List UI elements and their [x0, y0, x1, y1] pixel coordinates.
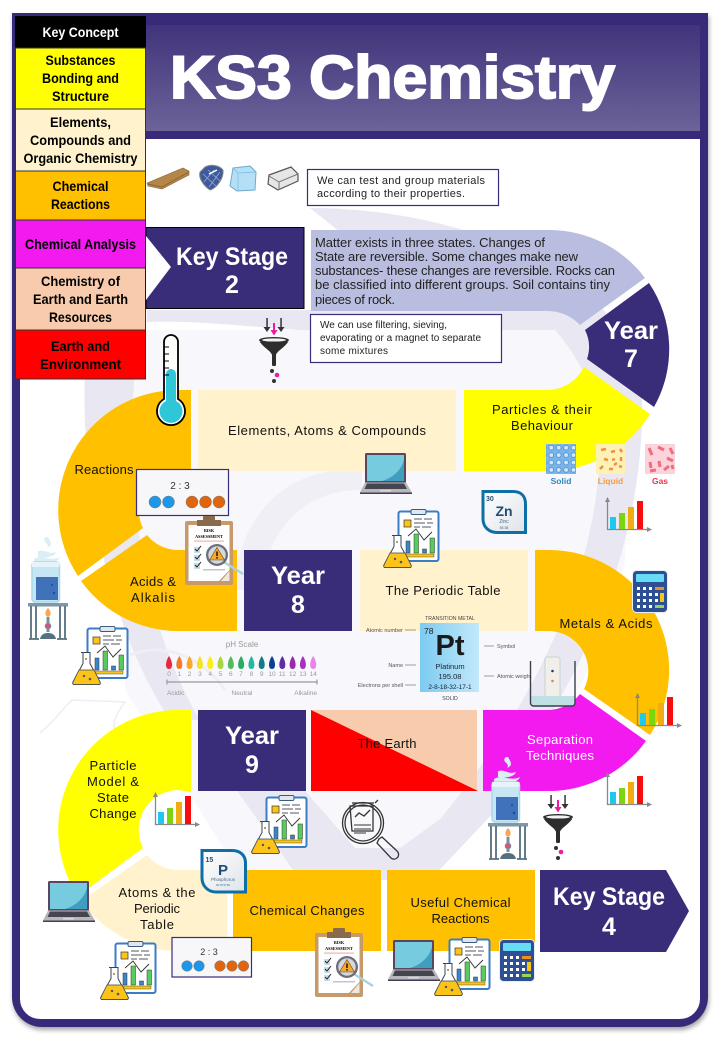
- liquid: Liquid: [598, 476, 623, 486]
- pH scale: 7: [239, 671, 243, 678]
- gas: Gas: [652, 476, 668, 486]
- pH scale: 8: [250, 671, 254, 678]
- key concept table: Key Concept: [42, 24, 119, 40]
- topic: separation techniques: [483, 694, 646, 791]
- topic: metals and acids: [535, 550, 669, 735]
- platinum element diagram: Symbol: [497, 644, 515, 650]
- topic: the earth: [311, 710, 478, 791]
- key: substances: Substances: [46, 52, 116, 68]
- topic: particles and behaviour: Particles & their: [492, 402, 593, 417]
- icon: report: [101, 942, 156, 1000]
- platinum element diagram: Name: [388, 663, 403, 669]
- key: elements: Organic Chemistry: [24, 150, 138, 166]
- title: KS3 Chemistry: [170, 44, 616, 111]
- icons: materials: [147, 165, 298, 191]
- topic: particle model: Model &: [87, 774, 139, 789]
- topic: the earth: The Earth: [358, 736, 416, 751]
- icon: calculator: [632, 570, 668, 612]
- text box: filtering: We can use filtering, sieving,: [320, 320, 447, 331]
- solid: Solid: [551, 476, 571, 486]
- key: reactions: [16, 171, 146, 220]
- topic: particle model: Particle: [90, 758, 136, 773]
- platinum element diagram: Atomic number: [366, 628, 403, 634]
- chromatography beaker: [530, 657, 575, 706]
- key stage 4 arrow: [540, 870, 689, 952]
- key: earth resources: Chemistry of: [41, 273, 120, 289]
- icon: bar chart: [605, 497, 652, 532]
- topic: separation techniques: Techniques: [526, 748, 594, 763]
- topic: useful chemical reactions: Useful Chemical: [410, 895, 511, 910]
- icon: funnel top: [259, 318, 289, 383]
- key stage 4 arrow: 4: [602, 913, 616, 941]
- icon: beaker and burner left: [28, 537, 68, 639]
- element tile zinc: [483, 492, 526, 532]
- pH scale: 11: [279, 671, 286, 678]
- topic: reactions: [58, 390, 191, 576]
- topic: acids and alkalis: [81, 535, 237, 631]
- key: elements: [16, 109, 146, 171]
- topic: atoms and the periodic table: Periodic: [134, 901, 180, 916]
- key stage 2 summary band: pieces of rock.: [315, 292, 395, 307]
- icon: bar chart: [635, 693, 682, 728]
- year 7 sector: 7: [624, 345, 638, 373]
- risk assessment clipboard: [315, 928, 373, 997]
- element tile phosphorus: Phosphorus: [211, 877, 236, 882]
- ratio box 1: [136, 470, 228, 516]
- platinum element diagram: 2-8-18-32-17-1: [428, 684, 472, 691]
- key: substances: Structure: [52, 88, 109, 104]
- key stage 4 arrow: Key Stage: [553, 883, 665, 911]
- risk assessment clipboard: [185, 516, 243, 585]
- ratio box 2: 2 : 3: [200, 947, 218, 957]
- key stage 2 box: 2: [225, 271, 239, 299]
- thermometer: [157, 335, 185, 425]
- topic: atoms and the periodic table: Table: [140, 917, 174, 932]
- element tile zinc: Zn: [495, 503, 513, 519]
- pH scale: 12: [289, 671, 297, 678]
- key: elements: Elements,: [50, 114, 111, 130]
- topic: useful chemical reactions: Reactions: [432, 911, 490, 926]
- key: substances: [16, 48, 146, 109]
- platinum element diagram: Platinum: [435, 662, 465, 671]
- icon: report: [252, 796, 306, 854]
- year 9 box: 9: [245, 751, 259, 779]
- key stage 2 summary band: substances- these changes are reversible. Rocks can: [315, 263, 615, 278]
- icon: laptop: [388, 940, 440, 981]
- pH scale: 3: [198, 671, 202, 678]
- icon: report: [384, 510, 438, 568]
- risk assessment clipboard: RISK: [334, 940, 345, 945]
- topic: reactions: Reactions: [74, 462, 134, 477]
- key: analysis: Chemical Analysis: [25, 236, 136, 252]
- pH scale: 13: [299, 671, 307, 678]
- platinum element diagram: Atomic weight: [497, 674, 532, 680]
- icon: funnel lower: [543, 795, 573, 860]
- key: earth resources: Earth and Earth: [33, 291, 128, 307]
- text box: filtering: [310, 314, 502, 362]
- element tile phosphorus: 30.973762: [216, 883, 230, 887]
- year 9 box: Year: [225, 722, 279, 750]
- risk assessment clipboard: RISK: [204, 528, 215, 533]
- topic: elements atoms and compounds: [198, 390, 456, 471]
- key: analysis: [16, 220, 146, 268]
- topic: acids and alkalis: Alkalis: [131, 590, 176, 605]
- text box: test and group: [308, 170, 498, 206]
- topic: metals and acids: Metals & Acids: [560, 616, 653, 631]
- key: substances: Bonding and: [42, 70, 119, 86]
- element tile zinc: 30: [486, 496, 494, 503]
- key: reactions: Reactions: [51, 196, 110, 212]
- pH scale: pH Scale: [226, 640, 259, 649]
- platinum element diagram: SOLID: [442, 696, 458, 702]
- pH scale: 5: [219, 671, 223, 678]
- platinum element diagram: Pt: [436, 630, 465, 662]
- key: elements: Compounds and: [30, 132, 131, 148]
- topic: particles and behaviour: [464, 367, 650, 471]
- key: earth resources: [16, 268, 146, 330]
- key: earth resources: Resources: [49, 309, 112, 325]
- topic: particle model: Change: [90, 806, 136, 821]
- states of matter: [546, 444, 675, 486]
- icon: laptop: [360, 453, 412, 494]
- icon: bar chart: [605, 772, 652, 807]
- platinum element diagram: [358, 616, 532, 702]
- pH scale: 2: [188, 671, 192, 678]
- topic: chemical changes: Chemical Changes: [250, 903, 365, 918]
- pH scale: 0: [167, 671, 171, 678]
- pH scale: 9: [260, 671, 264, 678]
- icon: report: [435, 938, 490, 996]
- year 8 box: [244, 550, 352, 631]
- element tile zinc: 65.38: [500, 526, 508, 530]
- pH scale: 6: [229, 671, 233, 678]
- pH scale: Neutral: [232, 690, 253, 697]
- risk assessment clipboard: ASSESSMENT: [195, 534, 223, 539]
- ratio box 1: 2 : 3: [170, 481, 190, 492]
- pH scale: Alkaline: [294, 690, 317, 697]
- key stage 2 summary band: [311, 230, 645, 325]
- platinum element diagram: Electrons per shell: [358, 683, 403, 689]
- year 8 box: 8: [291, 591, 305, 619]
- background watermark: [40, 208, 642, 880]
- pH scale: 10: [268, 671, 276, 678]
- key stage 2 summary band: be classified into different groups. Soil contains tiny: [315, 277, 610, 292]
- topic: particle model: [58, 710, 191, 896]
- icon: report: [73, 626, 128, 684]
- pH scale: [166, 640, 317, 697]
- pH scale: 1: [177, 671, 181, 678]
- pH scale: 14: [310, 671, 317, 678]
- platinum element diagram: 78: [424, 626, 434, 636]
- key concept table: [15, 16, 146, 379]
- text box: test and group: We can test and group materials: [317, 175, 486, 187]
- text box: test and group: according to their properties.: [317, 188, 465, 200]
- icon: calculator: [500, 940, 534, 982]
- topic: useful chemical reactions: [387, 870, 535, 951]
- topic: chemical changes: [233, 870, 381, 951]
- element tile phosphorus: [202, 850, 246, 892]
- ratio box 2: [172, 938, 252, 977]
- key: earth environment: Earth and: [51, 338, 110, 354]
- icon: magnifier analysis: [342, 800, 399, 859]
- key: reactions: Chemical: [52, 178, 108, 194]
- topic: atoms and the periodic table: [81, 855, 227, 951]
- key stage 2 box: [146, 228, 304, 308]
- year 7 sector: [585, 283, 669, 407]
- topic: particles and behaviour: Behaviour: [511, 418, 574, 433]
- icon: laptop: [43, 881, 95, 922]
- platinum element diagram: 195.08: [439, 672, 461, 681]
- element tile phosphorus: 15: [206, 857, 213, 864]
- key stage 2 summary band: State are reversible. Some changes make new: [315, 249, 579, 264]
- risk assessment clipboard: ASSESSMENT: [325, 946, 353, 951]
- topic: particle model: State: [97, 790, 129, 805]
- topic: acids and alkalis: Acids &: [130, 574, 176, 589]
- topic: periodic table: [360, 550, 528, 631]
- platinum element diagram: TRANSITION METAL: [425, 616, 475, 622]
- icon: beaker and burner right: [488, 757, 528, 859]
- element tile phosphorus: P: [218, 862, 228, 879]
- icon: bar chart: [153, 792, 200, 827]
- text box: filtering: evaporating or a magnet to separate: [320, 333, 481, 344]
- text box: filtering: some mixtures: [320, 346, 388, 357]
- key stage 2 box: Key Stage: [176, 243, 288, 271]
- key: earth environment: [16, 330, 146, 379]
- topic: atoms and the periodic table: Atoms & the: [118, 885, 196, 900]
- pH scale: 4: [208, 671, 212, 678]
- key stage 2 summary band: Matter exists in three states. Changes of: [315, 235, 545, 250]
- topic: periodic table: The Periodic Table: [386, 583, 500, 598]
- year 9 box: [198, 710, 306, 791]
- key: earth environment: Environment: [40, 356, 121, 372]
- year 7 sector: Year: [604, 317, 658, 345]
- element tile zinc: Zinc: [499, 519, 509, 525]
- year 8 box: Year: [271, 562, 325, 590]
- title banner: [146, 25, 700, 131]
- topic: elements atoms and compounds: Elements, Atoms & Compounds: [228, 423, 426, 438]
- pH scale: Acidic: [167, 690, 185, 697]
- topic: separation techniques: Separation: [527, 732, 593, 747]
